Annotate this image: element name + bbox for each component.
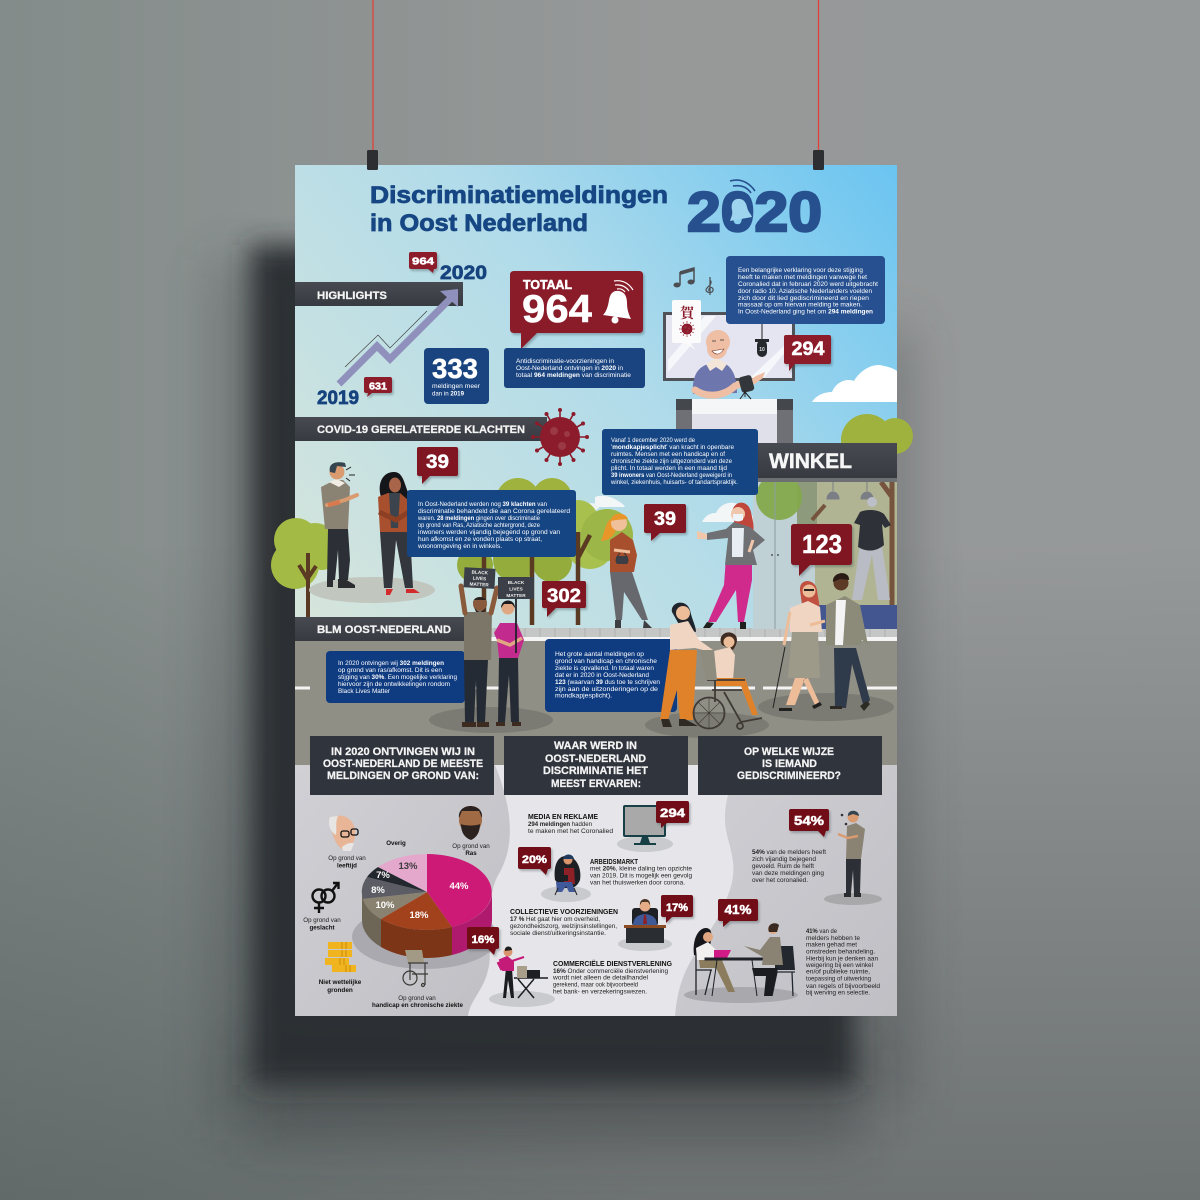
icon: old man head bbox=[329, 816, 358, 851]
text box handicap: 123 (waarvan 39 dus toe te schrijven bbox=[555, 679, 661, 686]
column heading 3: IS IEMAND bbox=[762, 758, 817, 770]
column heading 2: MEEST ERVAREN: bbox=[551, 778, 641, 790]
label handicap: handicap en chronische ziekte bbox=[372, 1002, 463, 1009]
pie labels bbox=[371, 861, 469, 921]
winkel building bbox=[752, 443, 897, 629]
text box radio 10 explanation: door radio 10. Aziatische Nederlanders voelden bbox=[738, 288, 873, 295]
text box covid complaints: inwoners werden vijandig bejegend op grond van bbox=[418, 529, 561, 536]
text 54 percent hostile treatment: gevoeld. Ruim de helft bbox=[752, 863, 814, 870]
text 41 percent unequal treatment: en/of publieke ruimte, bbox=[806, 968, 870, 976]
text 41 percent unequal treatment: van regels of bijvoorbeeld bbox=[806, 983, 881, 990]
icon: wheelchair under pie bbox=[403, 950, 428, 986]
text 54 percent hostile treatment: over het coronalied. bbox=[752, 877, 808, 884]
road bbox=[295, 628, 897, 766]
label ras: Op grond van bbox=[452, 843, 490, 850]
item commerciele dienstverlening: COMMERCIËLE DIENSTVERLENING bbox=[553, 959, 672, 968]
sign black lives matter left bbox=[463, 567, 496, 589]
item arbeidsmarkt: ARBEIDSMARKT bbox=[590, 857, 638, 866]
bubble 294 radio: 294 bbox=[792, 339, 825, 360]
text box radio 10 explanation: Een belangrijke verklaring voor deze stijging bbox=[738, 267, 864, 274]
person: man with dark hair bbox=[826, 573, 870, 711]
bubble 39 mask bbox=[644, 504, 686, 541]
woman at laptop bbox=[694, 928, 735, 995]
label handicap: Op grond van bbox=[398, 995, 436, 1002]
hanging strings bbox=[373, 0, 818, 152]
sign black lives matter right: LIVES bbox=[509, 586, 523, 592]
text box mondkapjesplicht: chronische ziekte zijn uitgezonderd van deze bbox=[611, 458, 733, 465]
column heading 1 bbox=[310, 736, 494, 795]
left tree bbox=[271, 518, 337, 617]
text box covid complaints bbox=[407, 490, 576, 557]
presenter bbox=[693, 330, 765, 399]
bubble 631 bbox=[364, 377, 392, 397]
text box covid complaints: discriminatie behandeld die aan Corona gerelateerd bbox=[418, 508, 571, 515]
shop lamps bbox=[827, 482, 873, 499]
ground shadow covid people bbox=[309, 577, 435, 603]
column heading 2 bbox=[504, 736, 688, 795]
label niet wettelijke gronden: Niet wettelijke bbox=[319, 979, 362, 986]
bubble 39 mask: 39 bbox=[654, 509, 676, 530]
item media en reclame: MEDIA EN REKLAME bbox=[528, 812, 598, 821]
text box handicap: mondkapjesplicht). bbox=[555, 692, 612, 700]
text box blm: In 2020 ontvingen wij 302 meldingen bbox=[338, 660, 444, 667]
text 41 percent unequal treatment: weigering bij een winkel bbox=[805, 962, 873, 969]
text box handicap bbox=[545, 639, 677, 712]
bubble 41 percent bbox=[718, 899, 758, 927]
sign black lives matter right: BLACK bbox=[508, 580, 525, 585]
text box total reports bbox=[504, 348, 645, 388]
bubble 631: 631 bbox=[369, 382, 387, 392]
label niet wettelijke gronden: gronden bbox=[327, 987, 353, 994]
label 2019: 2019 bbox=[317, 387, 359, 409]
text 54 percent hostile treatment: 54% van de melders heeft bbox=[752, 849, 826, 856]
person: woman arms crossed bbox=[378, 472, 420, 595]
text box blm: op grond van ras/afkomst. Dit is een bbox=[338, 667, 443, 674]
person: working at laptop bbox=[541, 854, 591, 902]
bubble 20 percent bbox=[518, 847, 551, 875]
text 41 percent unequal treatment bbox=[805, 928, 881, 996]
left gray shape bbox=[295, 765, 510, 1016]
winkel sign bbox=[752, 443, 897, 482]
sky background bbox=[295, 165, 897, 645]
icon: bell bbox=[603, 291, 631, 324]
item commerciele dienstverlening: het bank- en verzekeringswezen. bbox=[553, 988, 647, 996]
text box radio 10 explanation bbox=[726, 256, 885, 324]
item collectieve voorzieningen bbox=[510, 907, 618, 937]
label 2020: 2020 bbox=[440, 262, 487, 284]
label ras: Ras bbox=[465, 850, 477, 857]
ground shadow blm bbox=[429, 707, 553, 733]
label geslacht: Op grond van bbox=[303, 917, 341, 924]
bubble 964 small: 964 bbox=[412, 256, 435, 268]
sign black lives matter right: MATTER bbox=[506, 593, 526, 598]
person: official behind desk bbox=[618, 899, 672, 951]
text 41 percent unequal treatment: omstreden behandeling. bbox=[806, 948, 875, 956]
pie labels: 8% bbox=[371, 885, 385, 896]
tv screen and radio presenter bbox=[664, 300, 794, 399]
column heading 2: DISCRIMINATIE HET bbox=[543, 765, 648, 777]
mannequin bbox=[852, 497, 891, 600]
bubble totaal 964 with bell: 964 bbox=[522, 288, 592, 331]
icon: signal waves bbox=[614, 281, 633, 292]
item arbeidsmarkt: van 2019. Dit is mogelijk een gevolg bbox=[590, 872, 693, 880]
sign black lives matter left: LIVES bbox=[473, 576, 486, 581]
text box covid complaints: op grond van Ras, Aziatische achtergrond, deze bbox=[418, 522, 541, 529]
right gray shape bbox=[675, 765, 897, 1016]
item media en reclame: 294 meldingen hadden bbox=[528, 821, 593, 828]
person: blm man with sign bbox=[461, 567, 497, 727]
label niet wettelijke gronden bbox=[319, 979, 362, 994]
sign black lives matter left: MATTER bbox=[469, 582, 489, 588]
text box handicap: zijn aan de uitzonderingen op de bbox=[555, 686, 659, 693]
column heading 1: OOST-NEDERLAND DE MEESTE bbox=[323, 758, 483, 770]
text box handicap: ziekte is opvallend. In totaal waren bbox=[555, 665, 655, 672]
text box mondkapjesplicht bbox=[602, 429, 758, 495]
text box total reports: totaal 964 meldingen van discriminatie bbox=[516, 372, 632, 379]
text 41 percent unequal treatment: maken gehad met bbox=[806, 942, 857, 948]
text box total reports: Oost-Nederland ontvingen in 2020 in bbox=[516, 365, 624, 372]
bubble 294 radio bbox=[784, 335, 831, 371]
clouds and trees behind the scene bbox=[457, 414, 913, 625]
covid heading band: COVID-19 GERELATEERDE KLACHTEN bbox=[317, 424, 525, 436]
item arbeidsmarkt: van het thuiswerken door corona. bbox=[590, 880, 685, 886]
item commerciele dienstverlening: gerekend, maar ook bijvoorbeeld bbox=[553, 982, 639, 988]
pie labels: 10% bbox=[375, 900, 395, 911]
text box covid complaints: woonomgeving en in winkels. bbox=[417, 543, 502, 550]
highlights heading band: HIGHLIGHTS bbox=[317, 290, 387, 302]
column heading 3: OP WELKE WIJZE bbox=[744, 746, 834, 758]
title bbox=[370, 182, 668, 237]
box 333 meldingen meer: 333 bbox=[432, 353, 478, 384]
pie labels: 18% bbox=[409, 910, 429, 921]
bubble 964 small bbox=[409, 252, 437, 273]
column heading 3 bbox=[698, 736, 882, 795]
column heading 2: WAAR WERD IN bbox=[554, 740, 637, 752]
slice 8 percent bbox=[362, 877, 427, 899]
ground shadow wheelchair bbox=[645, 712, 769, 738]
speech bubble with virus: 賀 bbox=[680, 305, 696, 321]
ground shadow couple bbox=[758, 693, 894, 721]
pie labels: 13% bbox=[398, 861, 418, 872]
label overig: Overig bbox=[386, 840, 406, 847]
pie labels: 7% bbox=[376, 870, 390, 881]
bubble 20 percent: 20% bbox=[522, 854, 547, 866]
wheelchair bbox=[694, 655, 762, 729]
title: in Oost Nederland bbox=[370, 210, 588, 237]
hanging microphone: 10 bbox=[759, 347, 765, 353]
item arbeidsmarkt: met 20%, kleine daling ten opzichte bbox=[590, 866, 693, 872]
bubble 17 percent bbox=[661, 895, 693, 923]
winkel sign: WINKEL bbox=[769, 450, 852, 473]
bubble 16 percent bbox=[467, 927, 499, 955]
bubble 54 percent: 54% bbox=[794, 813, 824, 828]
person: woman pushing wheelchair bbox=[660, 603, 713, 727]
item collectieve voorzieningen: sociale dienst/uitkeringsinstantie. bbox=[510, 930, 606, 937]
bubble 41 percent: 41% bbox=[724, 902, 752, 917]
text box blm bbox=[326, 651, 465, 703]
text box handicap: grond van handicap en chronische bbox=[555, 658, 658, 665]
bubble 16 percent: 16% bbox=[472, 934, 495, 946]
item media en reclame bbox=[528, 812, 614, 835]
person: blm woman with sign bbox=[494, 577, 534, 726]
column heading 2: OOST-NEDERLAND bbox=[545, 753, 646, 765]
icon: bearded man head bbox=[459, 806, 482, 840]
text box mondkapjesplicht: plicht. In totaal werden in een maand tijd bbox=[611, 465, 728, 472]
item collectieve voorzieningen: 17 % Het gaat hier om overheid, bbox=[510, 916, 600, 923]
text box radio 10 explanation: In Oost-Nederland ging het om 294 meldingen bbox=[738, 308, 873, 316]
text box mondkapjesplicht: 39 inwoners van Oost-Nederland geweigerd in bbox=[611, 472, 733, 479]
item commerciele dienstverlening: 16% Onder commerciële dienstverlening bbox=[553, 968, 669, 975]
box 333 meldingen meer: meldingen meer bbox=[432, 383, 480, 390]
text 41 percent unequal treatment: toepassing of uitwerking bbox=[806, 976, 872, 982]
lower section base bbox=[295, 765, 897, 1016]
bubble 17 percent: 17% bbox=[666, 902, 688, 914]
icon: tv monitor bbox=[617, 806, 673, 852]
slice 7 percent bbox=[367, 867, 427, 892]
highlights heading band bbox=[295, 282, 463, 306]
icon: musical notes bbox=[674, 268, 713, 295]
text box radio 10 explanation: zich door dit lied gediscrimineerd en riepen bbox=[738, 295, 870, 302]
text box blm: Black Lives Matter bbox=[338, 688, 390, 695]
covid heading band bbox=[295, 417, 547, 441]
label leeftijd: leeftijd bbox=[337, 862, 357, 870]
bubble 294 media: 294 bbox=[660, 806, 685, 820]
item commerciele dienstverlening: wordt niet alleen de detailhandel bbox=[552, 974, 648, 982]
text 41 percent unequal treatment: Hierbij kun je denken aan bbox=[806, 956, 879, 962]
podium bbox=[676, 399, 793, 443]
label geslacht: geslacht bbox=[309, 924, 335, 932]
poster shadow on wall bbox=[215, 245, 910, 1140]
blm heading band: BLM OOST-NEDERLAND bbox=[317, 624, 451, 636]
column heading 3: GEDISCRIMINEERD? bbox=[737, 770, 841, 782]
pie labels: 44% bbox=[449, 881, 469, 892]
column heading 1: IN 2020 ONTVINGEN WIJ IN bbox=[331, 746, 475, 758]
slice 13 percent bbox=[378, 854, 427, 892]
person: woman with cane bbox=[773, 581, 825, 711]
person in wheelchair bbox=[694, 632, 762, 729]
text box covid complaints: In Oost-Nederland werden nog 39 klachten van bbox=[418, 501, 548, 508]
text 54 percent hostile treatment: zich vijandig bejegend bbox=[752, 856, 817, 863]
label leeftijd bbox=[328, 855, 366, 870]
label leeftijd: Op grond van bbox=[328, 855, 366, 862]
item media en reclame: te maken met het Coronalied bbox=[528, 828, 614, 835]
pie chart bbox=[352, 854, 498, 969]
bubble 123: 123 bbox=[802, 529, 842, 559]
text box total reports: Antidiscriminatie-voorzieningen in bbox=[516, 358, 615, 365]
text box blm: stijging van 30%. Een mogelijke verklaring bbox=[338, 674, 458, 681]
blm heading band bbox=[295, 617, 464, 641]
person: pointing man bbox=[321, 462, 357, 588]
icon: gold coins bbox=[325, 942, 356, 972]
cloud right bbox=[812, 365, 897, 402]
text box mondkapjesplicht: Vanaf 1 december 2020 werd de bbox=[611, 437, 696, 444]
text box mondkapjesplicht: winkel, ziekenhuis, huisarts- of tandartspraktijk. bbox=[610, 479, 738, 486]
man in chair bbox=[744, 923, 795, 996]
label ras bbox=[452, 843, 490, 857]
text box radio 10 explanation: Coronalied dat in februari 2020 werd uitgebracht bbox=[738, 281, 878, 288]
item collectieve voorzieningen: COLLECTIEVE VOORZIENINGEN bbox=[510, 907, 618, 916]
bubble totaal 964 with bell: TOTAAL bbox=[523, 277, 572, 292]
icon: coronavirus bbox=[531, 408, 589, 466]
icon: gender symbols bbox=[312, 883, 338, 913]
sign black lives matter right bbox=[498, 577, 534, 599]
person: woman with face mask bbox=[697, 503, 765, 629]
person: salesman at counter bbox=[489, 946, 555, 1007]
column heading 1: MELDINGEN OP GROND VAN: bbox=[327, 770, 479, 782]
bubble 54 percent bbox=[789, 809, 829, 837]
growth arrow chart bbox=[339, 289, 458, 384]
text box handicap: Het grote aantal meldingen op bbox=[555, 651, 645, 658]
item arbeidsmarkt bbox=[590, 857, 693, 886]
person: angry man bbox=[824, 811, 882, 905]
bubble 302: 302 bbox=[547, 586, 581, 607]
clip right bbox=[813, 150, 824, 170]
text box covid complaints: waren. 28 meldingen gingen over discriminatie bbox=[417, 515, 541, 522]
box 333 meldingen meer bbox=[424, 348, 489, 404]
label geslacht bbox=[303, 917, 341, 932]
text box handicap: dat er in 2020 in Oost-Nederland bbox=[555, 672, 650, 679]
person: woman with handbag bbox=[601, 514, 652, 628]
text 41 percent unequal treatment: 41% van de bbox=[806, 928, 838, 935]
label handicap bbox=[372, 995, 463, 1009]
text 41 percent unequal treatment: melders hebben te bbox=[806, 935, 861, 942]
item collectieve voorzieningen: gezondheidszorg, welzijnsinstellingen, bbox=[510, 923, 617, 930]
bubble 294 media bbox=[656, 801, 689, 828]
text box blm: hiervoor zijn de ontwikkelingen rondom bbox=[338, 681, 450, 688]
text box radio 10 explanation: heeft te maken met meldingen vanwege het bbox=[738, 274, 867, 281]
box 333 meldingen meer: dan in 2019 bbox=[432, 390, 465, 398]
text box mondkapjesplicht: 'mondkapjesplicht' van kracht in openbare bbox=[611, 444, 735, 451]
text 41 percent unequal treatment: bij werving en selectie. bbox=[806, 990, 870, 996]
bubble 39 covid: 39 bbox=[426, 452, 449, 473]
clip left bbox=[367, 150, 378, 170]
title: Discriminatiemeldingen bbox=[370, 182, 668, 209]
bubble 39 covid bbox=[417, 447, 458, 484]
poster bbox=[271, 165, 913, 1016]
table bbox=[705, 958, 765, 996]
text box radio 10 explanation: massaal op om hiervan melding te maken. bbox=[738, 302, 862, 308]
item commerciele dienstverlening bbox=[552, 959, 672, 996]
text 54 percent hostile treatment: van deze meldingen ging bbox=[752, 870, 825, 877]
pie side walls bbox=[362, 892, 381, 947]
scene: meeting at table bbox=[684, 923, 798, 1003]
slice 44 percent ras bbox=[427, 854, 492, 927]
slice 18 percent handicap bbox=[381, 892, 452, 930]
bubble 123 bbox=[791, 524, 852, 576]
text box mondkapjesplicht: ruimtes. Mensen met een handicap en of bbox=[611, 451, 725, 458]
bubble 302 bbox=[542, 581, 586, 617]
bubble totaal 964 with bell bbox=[510, 271, 643, 349]
sign black lives matter left: BLACK bbox=[471, 570, 489, 575]
text 54 percent hostile treatment bbox=[752, 849, 826, 884]
slice 10 percent bbox=[363, 892, 427, 919]
year 2020 with bell: 2020 bbox=[687, 180, 822, 243]
text box covid complaints: hun afkomst en ze vonden plaats op straat, bbox=[418, 536, 542, 543]
